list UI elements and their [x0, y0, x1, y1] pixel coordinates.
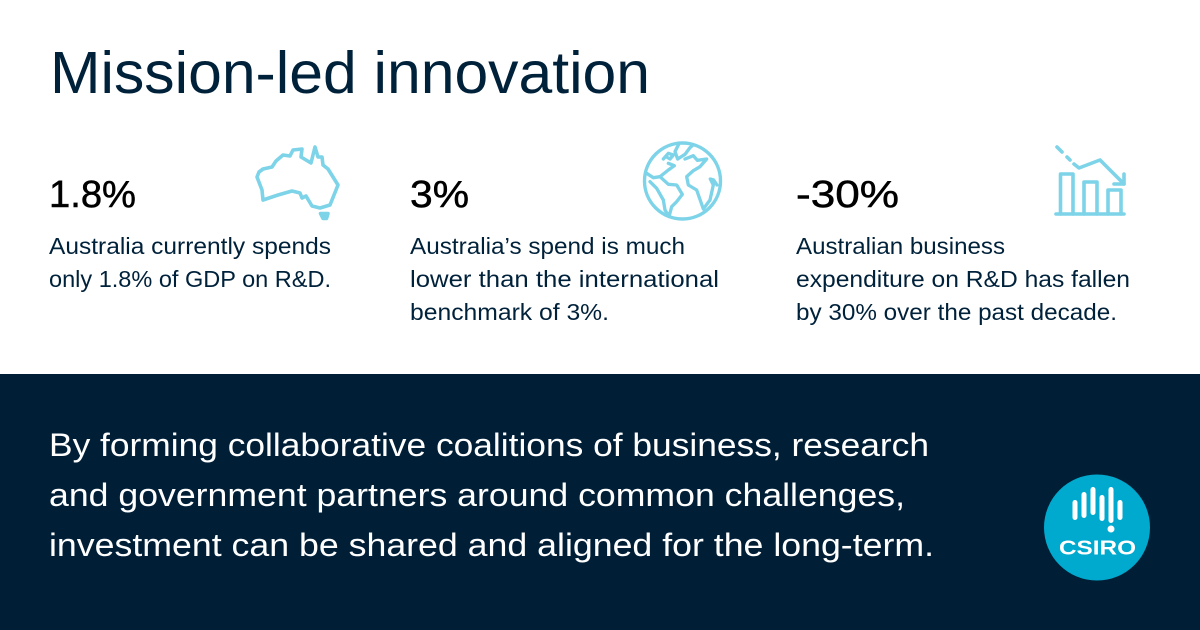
text block: message: By forming collaborative coalitions of business, research: [49, 427, 929, 463]
stat value: -30%: -30%: [796, 174, 899, 216]
icon: globe: [644, 143, 720, 219]
text block: stat 2 description: benchmark of 3%.: [410, 299, 609, 325]
text block: stat 3 description: expenditure on R&D has fallen: [796, 266, 1130, 292]
text block: stat 3 description: by 30% over the past decade.: [796, 299, 1117, 325]
panel: stat 3%: [410, 143, 720, 325]
panel: stat 1.8%: [49, 147, 338, 292]
panel: bottom message: [0, 374, 1200, 630]
text block: stat 2 description: Australia’s spend is much: [410, 233, 685, 259]
icon: falling bar chart: [1056, 147, 1124, 214]
stat value: 3%: 3%: [410, 174, 469, 216]
text block: message: and government partners around common challenges,: [49, 477, 905, 513]
text block: stat 2 description: [410, 233, 719, 325]
logo: CSIRO: [1044, 474, 1150, 580]
text block: message: [49, 427, 934, 563]
text block: stat 1 description: only 1.8% of GDP on R&D.: [49, 266, 331, 292]
panel: stat -30%: [796, 147, 1130, 325]
logo: CSIRO: CSIRO: [1059, 538, 1136, 560]
text block: stat 2 description: lower than the international: [410, 266, 719, 292]
text block: stat 1 description: Australia currently spends: [49, 233, 331, 259]
stat value: 1.8%: 1.8%: [49, 174, 136, 216]
text block: stat 1 description: [49, 233, 331, 292]
text block: message: investment can be shared and aligned for the long-term.: [49, 527, 934, 563]
panel background: [0, 374, 1200, 630]
text block: stat 3 description: [796, 233, 1130, 325]
title: Mission-led innovation: [50, 40, 650, 106]
icon: Australia map: [257, 147, 338, 218]
text block: stat 3 description: Australian business: [796, 233, 1005, 259]
